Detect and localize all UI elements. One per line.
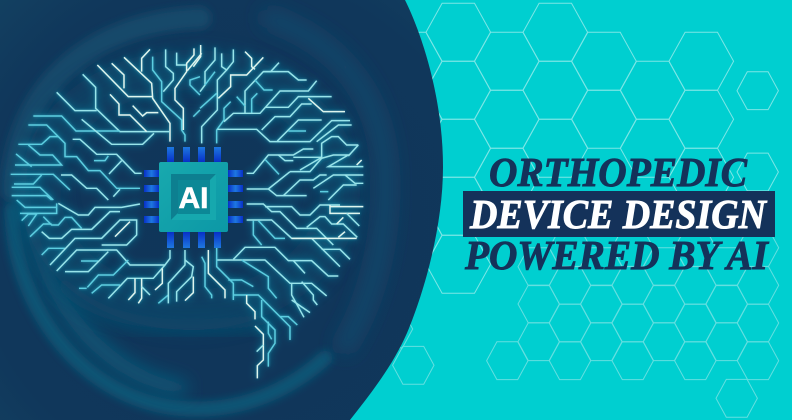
chip inner plate [171, 174, 216, 220]
chip pins: bottom [167, 232, 221, 248]
title line 2: DEVICE DESIGN [469, 191, 767, 237]
chip pins: left [144, 170, 159, 223]
traces: upper left quadrant [11, 48, 202, 200]
title line 1: ORTHOPEDIC [489, 149, 748, 195]
traces: lower left quadrant [17, 200, 193, 303]
chip label: AI [178, 182, 208, 215]
chip pins: right [228, 170, 243, 223]
title line 3: POWERED BY AI [464, 232, 770, 278]
hexagon pattern: lower cluster [371, 229, 779, 417]
title highlight bar [463, 191, 775, 237]
concentric glow rings [12, 18, 385, 409]
chip pins: top [167, 147, 221, 162]
dark navy curved panel [0, 0, 443, 420]
hexagon pattern: upper cluster [377, 3, 778, 293]
brain-shaped circuit traces [11, 45, 363, 378]
traces: lower right quadrant [202, 204, 363, 378]
title block [463, 149, 775, 278]
chip body [159, 162, 228, 232]
traces: upper right quadrant [193, 45, 363, 200]
microchip with AI label [144, 147, 243, 248]
